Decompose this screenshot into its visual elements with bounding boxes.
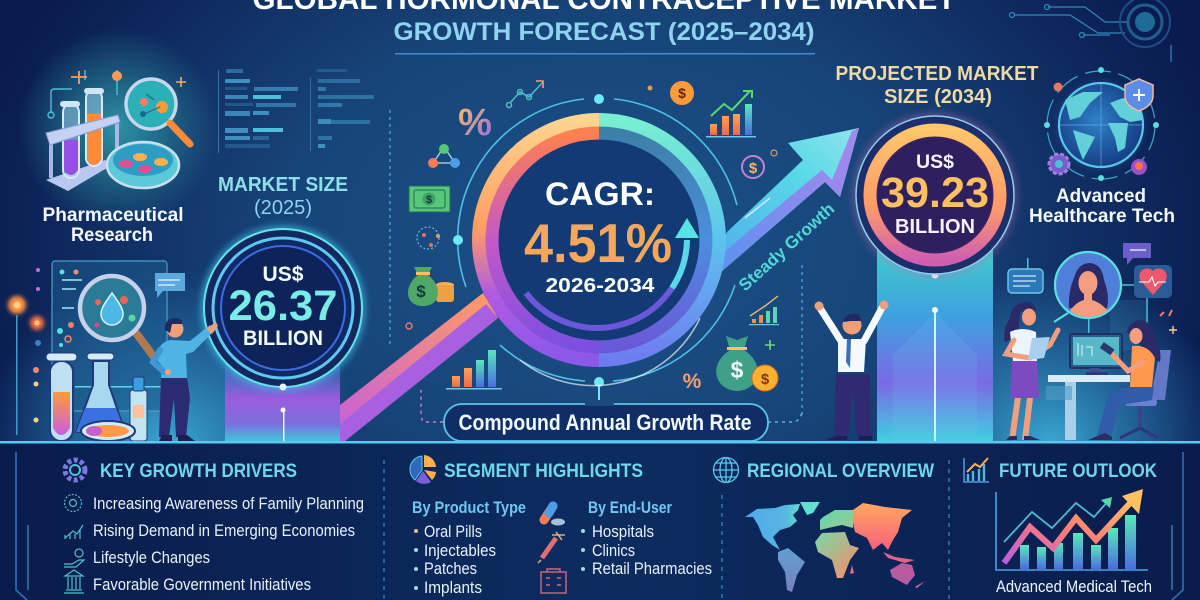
label: pharmaceutical research: Pharmaceutical (42, 205, 184, 226)
CAGR text: 2026-2034 (546, 275, 655, 297)
chart: future growth (996, 489, 1148, 570)
section: future outlook (964, 458, 1157, 596)
list: by product type: Implants (424, 578, 482, 597)
column: market size 2025 (225, 357, 340, 441)
label: advanced healthcare tech: Advanced (1056, 186, 1146, 207)
icon: lab scene with scientist (8, 261, 218, 441)
list: by product type: By Product Type (412, 498, 526, 517)
CAGR text: CAGR: (545, 176, 655, 212)
label: steady growth: Steady Growth (735, 199, 838, 295)
list: by product type: Oral Pills (424, 522, 482, 541)
icon: money bag right: $ (731, 357, 744, 383)
circuit decoration top right (1010, 0, 1171, 62)
list: by end-user (581, 498, 712, 578)
stat circle: projected market size: 39.23 (881, 169, 989, 217)
callout: compound annual growth rate (444, 400, 768, 441)
list: by end-user: Clinics (592, 541, 635, 560)
figure: celebrating man (814, 300, 888, 440)
list: by end-user: Retail Pharmacies (592, 559, 712, 578)
icon: globe (714, 458, 738, 482)
icon: money bag left (406, 267, 454, 329)
heading: projected market size: PROJECTED MARKET (836, 63, 1038, 85)
panel: bottom summary (0, 441, 1200, 600)
icon: trend line (506, 81, 543, 108)
heading: KEY GROWTH DRIVERS (100, 461, 297, 482)
heading: FUTURE OUTLOOK (999, 461, 1157, 482)
list: by product type (412, 498, 526, 597)
list: by end-user: Hospitals (592, 522, 654, 541)
label: pharmaceutical research: Research (71, 225, 153, 246)
icon: gear (65, 460, 85, 480)
icon: coin ring (742, 150, 777, 178)
code readout panel (218, 69, 374, 153)
heading: SEGMENT HIGHLIGHTS (444, 461, 643, 482)
driver list: Favorable Government Initiatives (93, 575, 311, 594)
icons: pill, syringe, hospital (538, 506, 566, 593)
dotted guide lines (390, 110, 802, 422)
icon: cash note: $ (426, 194, 432, 206)
stat circle: projected market size: BILLION (895, 216, 975, 238)
stat circle: market size 2025: 26.37 (228, 282, 338, 330)
chart: growth arrow left section (340, 293, 498, 441)
icon: small bars right (749, 296, 779, 325)
icon: money bag right: % (683, 370, 702, 393)
section: key growth drivers (64, 460, 364, 594)
section: segment highlights (410, 455, 712, 597)
section: regional overview (714, 458, 934, 592)
stat circle: projected market size (853, 113, 1017, 277)
chart: CAGR ring gauge (453, 94, 737, 403)
icon: bars with trend (706, 91, 756, 138)
heading: market size 2025 (218, 174, 348, 219)
icon: money bag right (683, 336, 778, 393)
icon: globe advanced healthcare (1044, 67, 1159, 181)
heading: projected market size (836, 63, 1038, 108)
icon: pharmaceutical research lab set (18, 28, 218, 228)
icon: cash note (409, 186, 450, 212)
label: advanced healthcare tech (1029, 186, 1175, 227)
heading: market size 2025: MARKET SIZE (218, 174, 348, 196)
label: advanced healthcare tech: Healthcare Tech (1029, 206, 1175, 227)
driver icons (64, 494, 84, 593)
driver list (93, 494, 364, 594)
icon: money bag right: $ (761, 371, 770, 388)
CAGR text: 4.51% (524, 212, 672, 274)
label: pharmaceutical research (42, 205, 184, 246)
stat circle: projected market size: US$ (916, 152, 954, 173)
icon: growth chart (964, 458, 989, 482)
stat circle: market size 2025: BILLION (243, 327, 323, 350)
stat circle: market size 2025 (204, 229, 362, 390)
driver list: Rising Demand in Emerging Economies (93, 521, 355, 540)
CAGR text (524, 176, 672, 297)
heading: market size 2025: (2025) (254, 197, 312, 219)
icon: coin ring: $ (749, 160, 758, 177)
heading: REGIONAL OVERVIEW (747, 461, 934, 482)
subtitle: GROWTH FORECAST (2025–2034) (394, 18, 814, 46)
driver list: Increasing Awareness of Family Planning (93, 494, 364, 513)
chart: world map (745, 502, 925, 592)
label: Advanced Medical Tech (996, 577, 1152, 596)
icon: percent sign: % (458, 102, 492, 144)
icon: dollar bubble: $ (678, 85, 686, 101)
icon: pie chart (410, 455, 436, 484)
chart: growth arrow right section (692, 128, 859, 300)
column: projected market size (877, 235, 993, 441)
list: by product type: Patches (424, 559, 477, 578)
icon: dollar bubble (648, 81, 694, 105)
stat circle: market size 2025: US$ (262, 263, 304, 286)
figure: telehealth scene (1004, 243, 1177, 440)
icon: people dashed cluster (417, 227, 440, 249)
list: by product type: Injectables (424, 541, 496, 560)
list: by end-user: By End-User (588, 498, 672, 517)
driver list: Lifestyle Changes (93, 548, 210, 567)
icon: bars bottom (446, 350, 502, 390)
icon: network nodes (428, 144, 460, 168)
callout: compound annual growth rate: Compound Annual Growth Rate (458, 410, 752, 435)
heading: projected market size: SIZE (2034) (884, 86, 992, 108)
icon: money bag left: $ (416, 282, 426, 301)
